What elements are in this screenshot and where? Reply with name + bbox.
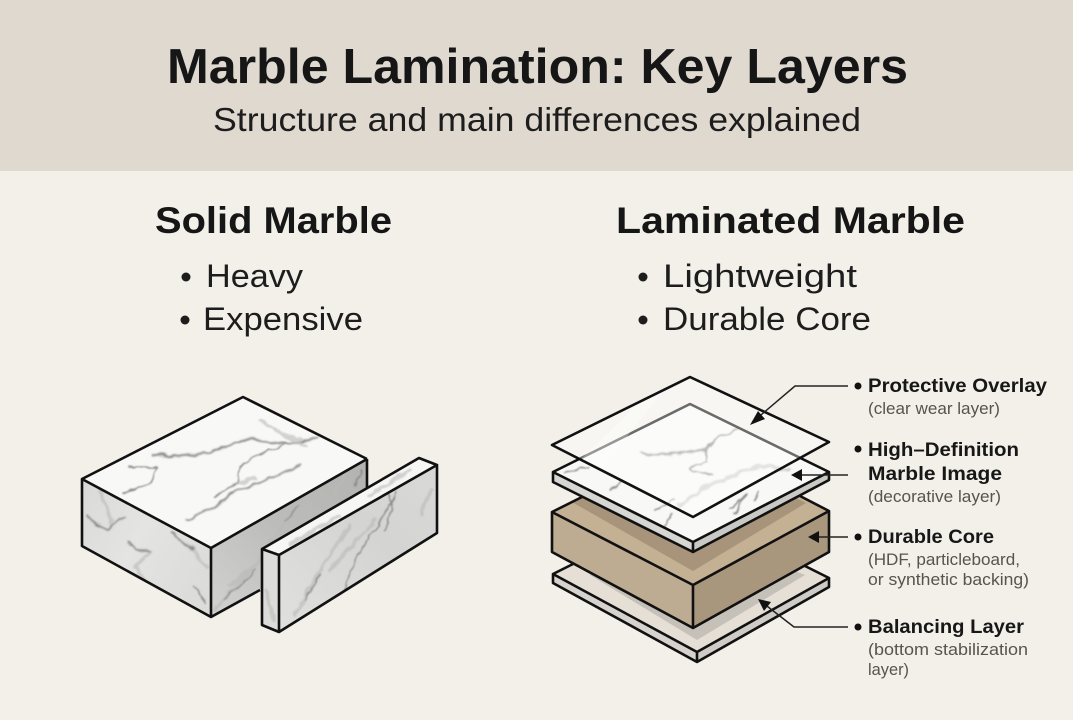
title: Marble Lamination: Key Layers [167,40,908,94]
marble block [82,397,367,617]
illustration: laminated layer stack [552,377,829,662]
label: balancing layer: (bottom stabilization [868,641,1028,659]
label: high-definition marble image: (decorative layer) [868,488,1001,506]
arrow: marble image [791,469,848,481]
arrow: protective overlay [750,386,848,425]
arrow: durable core [808,531,848,543]
heading: solid marble: Solid Marble [155,200,392,241]
header band [0,0,1073,171]
label: balancing layer [854,616,1028,679]
label: high-definition marble image [854,439,1019,506]
marble slab [262,458,437,632]
bullet: expensive: Expensive [203,301,363,337]
bullet: heavy: Heavy [206,258,303,294]
label: protective overlay: (clear wear layer) [868,400,1000,418]
label: protective overlay [854,375,1047,418]
balancing layer [553,510,829,662]
label: high-definition marble image: Marble Image [868,463,1002,485]
label: durable core [854,526,1029,589]
durable core [552,445,829,628]
label: protective overlay: Protective Overlay [868,375,1047,397]
panel: solid marble text [155,200,392,337]
label: durable core: Durable Core [868,526,994,548]
label: balancing layer: Balancing Layer [868,616,1024,638]
label: durable core: (HDF, particleboard, [868,551,1020,569]
panel: laminated marble text [616,200,965,337]
protective overlay [552,377,829,517]
bullet: lightweight: Lightweight [663,258,857,294]
label: high-definition marble image: High–Definition [868,439,1019,461]
label: durable core: or synthetic backing) [868,571,1029,589]
heading: laminated marble: Laminated Marble [616,200,965,241]
label: balancing layer: layer) [868,661,909,679]
arrow: balancing layer [758,599,848,627]
bullet: durable core: Durable Core [663,301,871,337]
marble image layer [553,404,829,552]
subtitle: Structure and main differences explained [213,101,861,138]
illustration: solid marble block and slab [82,397,437,632]
